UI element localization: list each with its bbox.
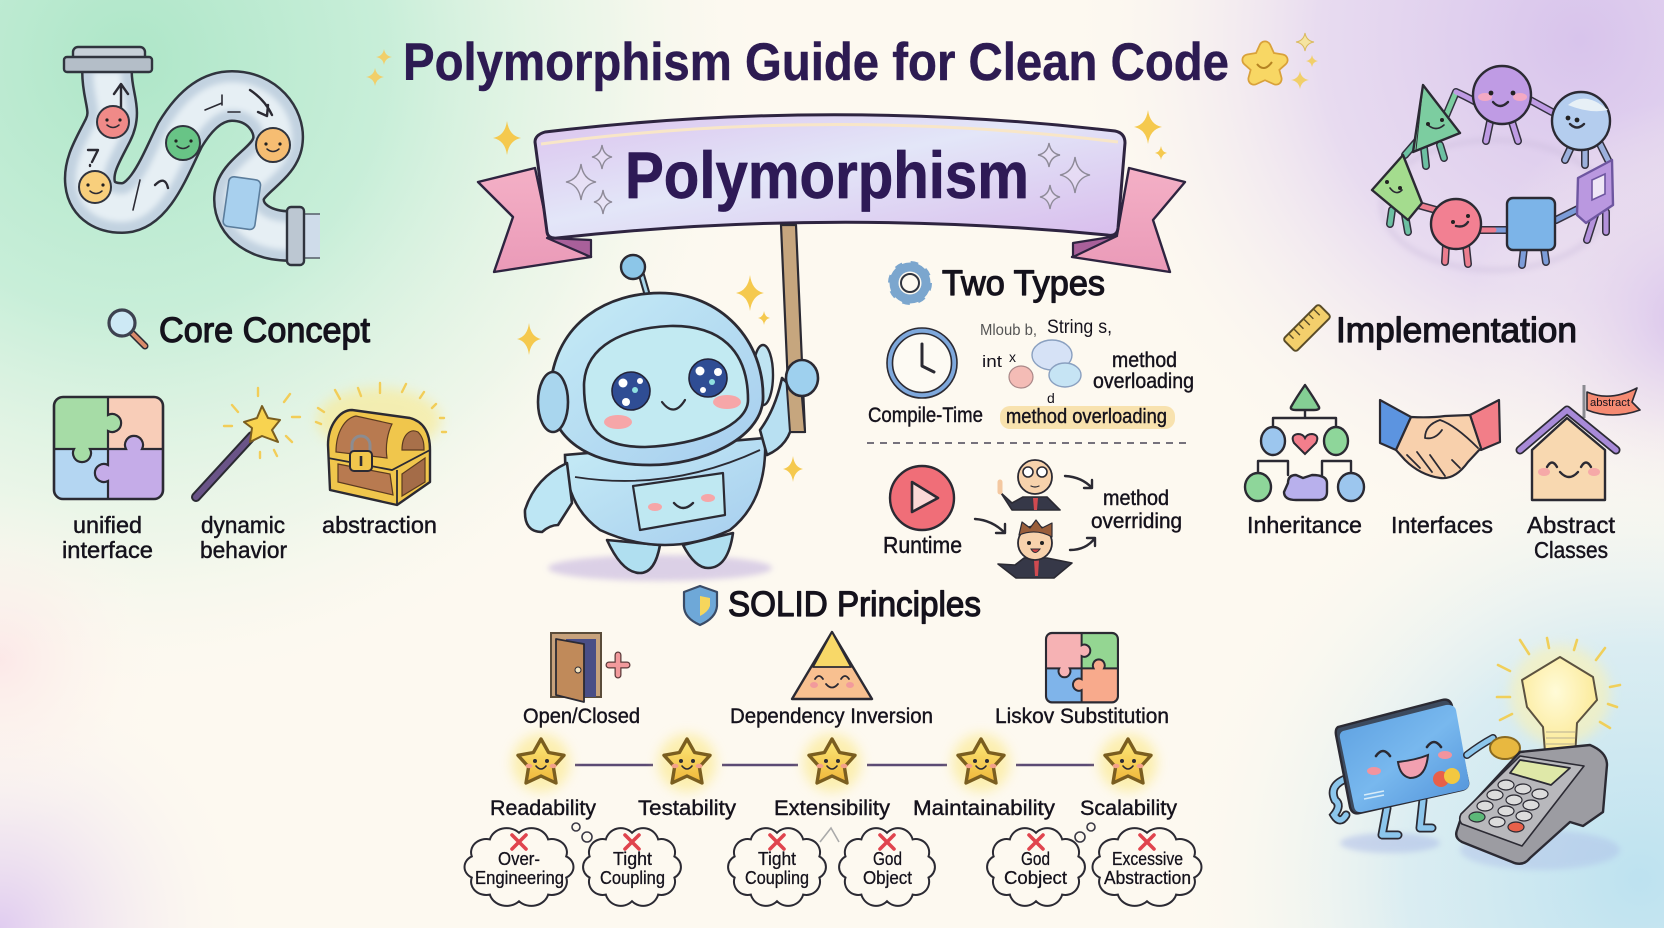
heading: Two Types <box>942 264 1105 303</box>
cloud: god object: Object <box>863 868 912 888</box>
cloud: over-engineering: Over- <box>498 849 540 869</box>
light bulb <box>1497 638 1620 757</box>
sign pole <box>781 225 805 432</box>
label: Liskov Substitution <box>995 705 1169 728</box>
icon: puzzle <box>54 397 163 499</box>
icon: magnifying glass <box>109 310 145 346</box>
section: SOLID principles <box>465 585 1201 906</box>
robot head <box>550 293 763 465</box>
icon: Liskov puzzle <box>1046 633 1118 702</box>
icon: play button <box>890 466 954 530</box>
illustration: robot mascot with sign pole <box>525 225 818 581</box>
cloud: excessive abstraction: Abstraction <box>1104 868 1191 888</box>
icon: inheritance tree <box>1245 385 1364 501</box>
label: Abstract <box>1527 512 1616 538</box>
icon: gold sparkles around banner <box>493 110 1167 482</box>
cloud: god object <box>839 828 935 906</box>
icon: child class character <box>998 520 1072 578</box>
icon: handshake <box>1380 400 1500 478</box>
icon: dependency pyramid <box>792 632 872 699</box>
label: compile-time: Compile-Time <box>868 404 983 427</box>
label: unified <box>73 512 142 538</box>
cloud: over-engineering: Engineering <box>475 868 564 888</box>
card character <box>1333 700 1520 835</box>
label: method overriding: method <box>1103 487 1169 510</box>
ribbon tails <box>478 168 1185 272</box>
quality labels: Extensibility <box>774 797 891 820</box>
label: abstraction <box>322 512 437 538</box>
illustration: ring of shape characters <box>1372 66 1613 270</box>
label <box>62 512 153 563</box>
heading: Implementation <box>1336 311 1577 350</box>
label: Inheritance <box>1247 512 1362 538</box>
icon: magic wand <box>196 388 300 497</box>
label: interface <box>62 537 153 563</box>
cloud: excessive abstraction <box>1093 828 1201 906</box>
cloud: god cobject: Cobject <box>1004 868 1067 888</box>
label: runtime: Runtime <box>883 532 962 558</box>
label <box>200 512 287 563</box>
overloading type tokens: Mloub b, <box>980 322 1037 339</box>
section: two types <box>867 264 1194 578</box>
label: Interfaces <box>1391 512 1493 538</box>
label: method overloading: method <box>1112 349 1177 372</box>
overloading type tokens <box>980 317 1112 406</box>
overloading type tokens: d <box>1047 390 1055 406</box>
illustration: credit card at payment terminal with light bulb <box>1333 638 1620 870</box>
cloud: god object: God <box>873 849 902 869</box>
icon: parent class character <box>1000 460 1060 510</box>
payment terminal <box>1456 745 1607 864</box>
anti-pattern clouds <box>465 823 1201 906</box>
quality labels: Scalability <box>1080 797 1178 820</box>
overloading type tokens: int <box>982 352 1002 371</box>
icon: title sparkles and star <box>366 33 1318 89</box>
highlighted pill: method overloading: method overloading <box>1006 406 1167 428</box>
arrows: override flow <box>975 476 1095 550</box>
cloud: tight coupling <box>728 828 826 906</box>
label: method overriding: overriding <box>1091 510 1182 533</box>
cloud: tight coupling: Tight <box>613 849 652 869</box>
icon: clock <box>887 328 957 398</box>
icon: abstract house with flag <box>1520 385 1640 500</box>
heading: Core Concept <box>159 311 370 350</box>
label: method overloading <box>1093 349 1194 393</box>
cloud: tight coupling: Coupling <box>745 868 809 888</box>
banner <box>478 115 1185 272</box>
label: dynamic <box>201 512 285 538</box>
icon: quality stars <box>512 734 1157 792</box>
cloud: god cobject <box>987 828 1085 906</box>
quality labels <box>490 797 1178 820</box>
overloading type tokens: x <box>1009 349 1016 365</box>
section: implementation <box>1245 304 1640 563</box>
banner body <box>535 115 1125 238</box>
banner heading: Polymorphism <box>625 138 1029 212</box>
illustration: pipe with polymorphic shapes <box>64 47 320 265</box>
title: Polymorphism Guide for Clean Code <box>403 33 1229 92</box>
label: behavior <box>200 537 287 563</box>
icon: ruler <box>1283 304 1331 352</box>
icon: treasure chest <box>316 383 446 505</box>
label: Open/Closed <box>523 705 640 728</box>
label <box>1527 512 1616 563</box>
icon: abstract house with flag: abstract <box>1590 397 1630 409</box>
quality labels: Testability <box>638 797 737 820</box>
cloud: tight coupling: Tight <box>758 849 796 869</box>
quality labels: Readability <box>490 797 596 820</box>
section: core concept <box>54 310 446 563</box>
label: method overloading: overloading <box>1093 370 1194 393</box>
icon: gear <box>891 264 929 302</box>
cloud: excessive abstraction: Excessive <box>1112 849 1183 869</box>
label: method overriding <box>1091 487 1182 533</box>
overloading type tokens: String s, <box>1047 317 1112 338</box>
cloud: god cobject: God <box>1021 849 1050 869</box>
cloud: over-engineering <box>465 828 573 906</box>
label: Dependency Inversion <box>730 705 933 728</box>
cloud: tight coupling <box>583 828 681 906</box>
quality labels: Maintainability <box>913 797 1056 820</box>
icon: open door with plus <box>551 633 627 702</box>
icon: banner sparkles <box>566 143 1090 214</box>
label: Classes <box>1534 537 1608 563</box>
icon: shield <box>684 586 717 625</box>
heading: SOLID Principles <box>728 585 981 624</box>
cloud: tight coupling: Coupling <box>600 868 665 888</box>
